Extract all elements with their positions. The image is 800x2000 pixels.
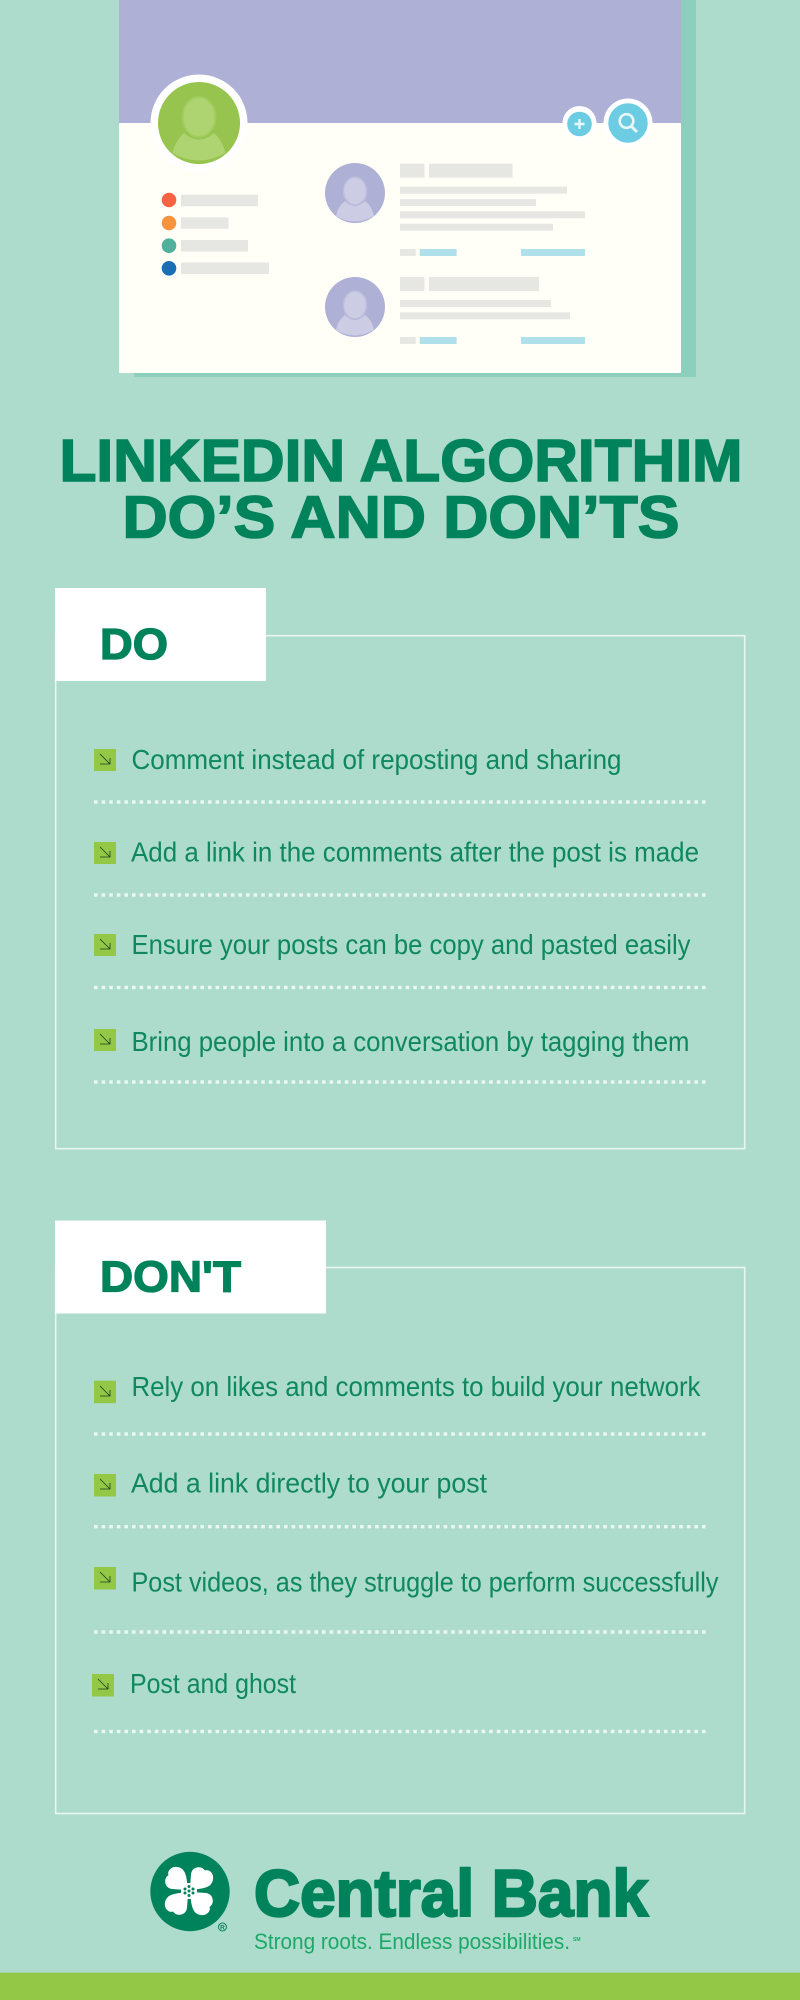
do heading: DO (100, 620, 168, 669)
do item 1 (94, 744, 706, 802)
panel: do (55, 588, 745, 1149)
don't item 4: Post and ghost (130, 1668, 296, 1699)
don't item 3: Post videos, as they struggle to perform successfully (132, 1567, 719, 1598)
search button (604, 98, 652, 148)
profile avatar (150, 74, 248, 172)
do heading (55, 588, 266, 681)
title: DO’S AND DON’TS (122, 485, 680, 551)
don't item 4 (92, 1668, 706, 1732)
profile header banner (119, 0, 681, 123)
panel frame (56, 636, 745, 1149)
wordmark: Central Bank (254, 1856, 648, 1930)
illustration: social profile card (119, 0, 696, 377)
don't item 1 (94, 1371, 706, 1434)
do item 1: Comment instead of reposting and sharing (132, 744, 622, 775)
footer bar (0, 1973, 800, 2000)
icon: dogwood flower badge (150, 1852, 230, 1932)
do item 2 (94, 837, 706, 895)
post two (325, 277, 585, 344)
service mark: SM (573, 1937, 580, 1943)
don't item 1: Rely on likes and comments to build your network (132, 1371, 701, 1402)
title (60, 428, 742, 551)
add button (562, 106, 596, 140)
don't item 2: Add a link directly to your post (131, 1468, 487, 1499)
don't heading (55, 1220, 326, 1314)
icon: dogwood flower badge: R (220, 1924, 225, 1932)
do item 4: Bring people into a conversation by tagging them (132, 1026, 690, 1057)
post one (325, 163, 585, 256)
do item 3 (94, 929, 706, 988)
don't item 3 (94, 1567, 719, 1632)
profile menu list (162, 193, 269, 276)
panel: don't (55, 1220, 745, 1814)
panel frame (56, 1268, 745, 1814)
tagline: Strong roots. Endless possibilities. (254, 1929, 570, 1954)
title: LINKEDIN ALGORITHIM (60, 428, 742, 494)
do item 2: Add a link in the comments after the post is made (131, 837, 699, 868)
don't item 2 (94, 1468, 706, 1527)
logo: central bank (150, 1852, 648, 1954)
don't heading: DON'T (100, 1252, 241, 1302)
do item 4 (94, 1026, 706, 1082)
do item 3: Ensure your posts can be copy and pasted easily (132, 929, 691, 960)
